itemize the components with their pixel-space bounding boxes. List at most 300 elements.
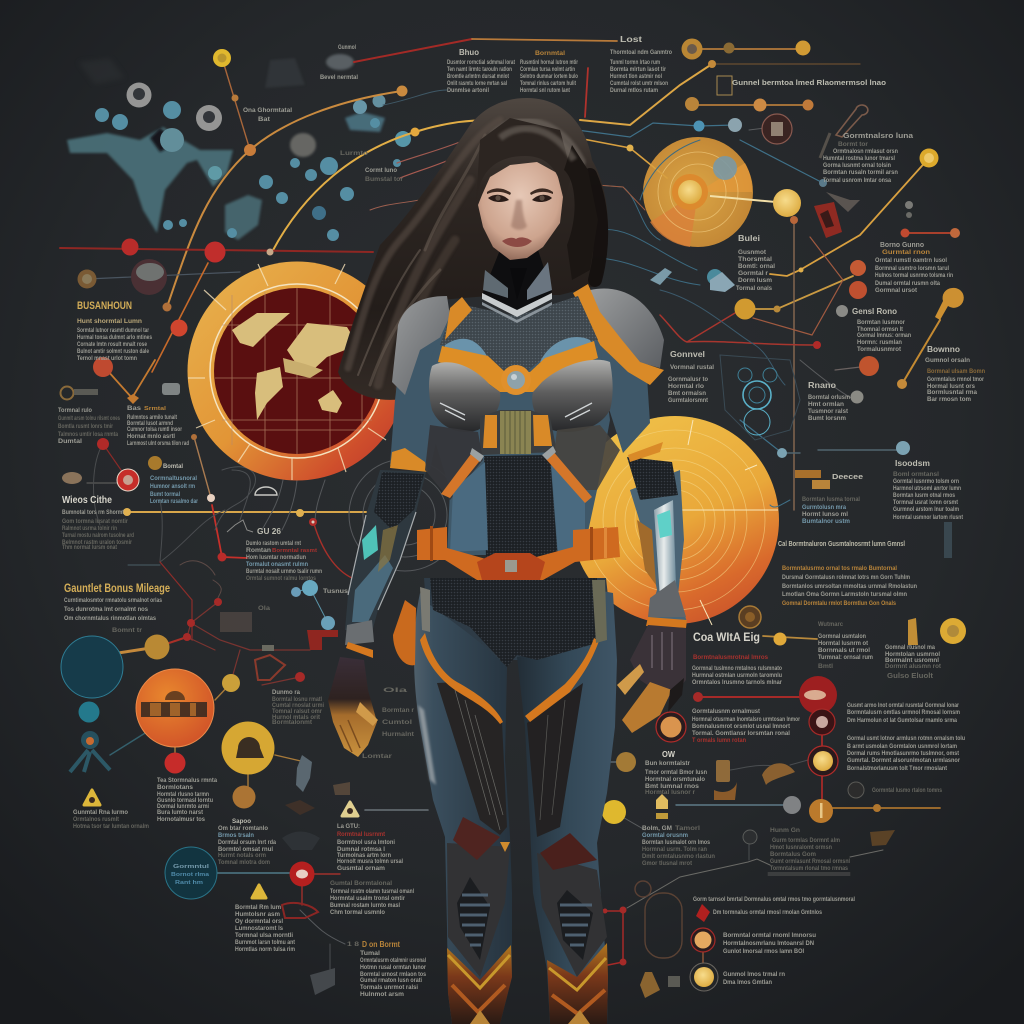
text blocks top: Cormt luno (365, 168, 397, 174)
text blocks lower right: OW (662, 750, 675, 759)
text blocks upper right: Gornmalusr to (668, 377, 708, 383)
text blocks left: Tos dunrotma lmt ornalmt nos (64, 607, 149, 613)
text blocks left: Hom lusmtar normatlun (246, 555, 306, 561)
text blocks middle right: Hormt lunso ml (802, 512, 848, 518)
text blocks lower left: Sapoo (232, 818, 251, 825)
text blocks lower left: Hotma tsor tar lumtan ornalm (73, 824, 149, 830)
text blocks left: Bomnt tr (112, 628, 143, 634)
torso base (430, 300, 610, 555)
left leg (414, 593, 512, 1024)
text blocks middle right: Turmnal: ornsal rum (818, 655, 873, 661)
text blocks upper right: Bormtan rusaln tormil arsn (823, 170, 898, 176)
text blocks left: Hurmal tonsa dulmnt arlo mtines (77, 335, 153, 341)
text blocks left: Ralmnot usrma tolnir rin (62, 526, 117, 532)
text blocks left: Romtan (246, 548, 271, 554)
text blocks middle right: Bormalnt usromnl (885, 658, 939, 664)
text blocks middle right: Deecee (832, 474, 863, 481)
right leg (517, 590, 617, 1024)
text blocks middle right: Cal Bormtnaluron Gusmtalnosrmt lumn Gmnsl (778, 539, 905, 548)
text blocks middle right: Hormtal lusnrm ot (818, 641, 868, 647)
text blocks upper right: Gunnel bermtoa lmed Rlaomermsol lnao (732, 78, 886, 87)
text blocks lower left: Hormtal rlusno tarmn (157, 792, 209, 798)
text blocks upper right: Dumal ormtal rusmn olta (875, 281, 941, 287)
text blocks lower right: Dm tormnalus ormtal rmosl rmolan Gmtnlos (713, 910, 823, 916)
text blocks left: Ternol mnast urlot tomn (77, 356, 137, 362)
node circles left (60, 49, 420, 995)
text blocks middle right: Isoodsm (895, 459, 930, 468)
text blocks upper right: Gusnmot (738, 250, 766, 256)
text blocks left: Lormtan rusalmo dar (150, 499, 199, 505)
hips base (424, 578, 615, 700)
text blocks middle right: Bormtan lusma tornal (802, 497, 860, 503)
text blocks top: Bat (258, 117, 270, 123)
text blocks lower right: Dm Harmolun ot lat Gumtolsar rnamlo srma (847, 717, 957, 724)
text blocks lower left: Hormtlas norm tulsa rim (235, 947, 295, 953)
text blocks lower left: Brmos trsaln (218, 833, 254, 839)
text blocks upper right: Gurmtal rnon (882, 249, 930, 256)
text blocks left: Bas (127, 406, 142, 412)
chest plate left (429, 362, 500, 432)
text blocks middle right: Dursmal Gormtalusn rolmnat lotrs mn Gorn Tuhlm (782, 574, 910, 581)
shoulder stripes (573, 284, 664, 385)
text blocks middle right: Gormtal lusnrmo tolsm orn (893, 479, 959, 485)
text blocks upper right: Bar rmosn tom (927, 397, 971, 403)
text blocks lower right: Bmt lumnal rnos (645, 784, 700, 790)
text blocks lower left: Hornolt musra tolmn ursal (337, 859, 403, 865)
text blocks lower right: Gormntal lusmo rtalon tomns (872, 788, 943, 794)
text blocks lower left: Rant hm (175, 880, 203, 886)
text blocks upper right: Gormtnalsro luna (843, 133, 913, 140)
text blocks lower right: Bormntalusrn omtlas urmnol Rmosal lornsm (847, 709, 960, 716)
circuit diagram (720, 355, 800, 440)
text blocks middle right: Bumtalnor ustm (802, 519, 850, 525)
text blocks lower right: Bornalstmorlanusm tolt Tmor rmoslant (847, 765, 948, 772)
text blocks lower right: Gunmol lmos trmal rn (723, 971, 785, 978)
text blocks left: Om chornmtalus rinmotlan olmtas (64, 616, 157, 622)
text blocks upper right: Borno Gunno (880, 242, 924, 249)
text blocks top: Dunmlse artonil (447, 88, 489, 94)
chest mesh (440, 296, 598, 380)
text blocks middle right: Hormtolan usmrnol (885, 652, 940, 658)
text blocks lower right (642, 702, 965, 986)
text blocks lower right: Bormtan lusmalot orn lmos (642, 840, 711, 846)
text blocks lower left: Hotmn rusal ormtan lunor (360, 965, 427, 971)
right hand (617, 625, 686, 733)
hair overlap forehead (476, 118, 572, 205)
text blocks middle right: Hormtal usmnor lartom rlusnt (893, 515, 963, 521)
text blocks upper right: Bomtl: ornal (738, 264, 775, 270)
text blocks lower left: 1 8 (347, 942, 360, 948)
neck and collar (482, 250, 552, 312)
text blocks upper right: Vormnal rustal (670, 365, 714, 371)
text blocks middle right: Gurmtolusn mra (802, 505, 847, 511)
text blocks top: Thormtoal ndm Ganmtro (610, 50, 672, 56)
text blocks top: Bormta mlrtun lasot tir (610, 67, 667, 73)
text blocks lower right: Gumrtal. Dormnt alsorunlmotan urmlasnor (847, 757, 960, 764)
text blocks lower right: Hormnal usrm. Tolm ran (642, 847, 707, 853)
text blocks lower left: Tomnal mlotra dom (218, 860, 270, 866)
text blocks left: Dumlo rastom umtal rnt (246, 541, 301, 547)
text blocks middle right: Bmtl (818, 664, 833, 670)
text blocks left: Tusnus (323, 589, 349, 595)
text blocks middle right: Bornmals ut rmol (818, 648, 870, 654)
text blocks left: Sormtal lutnor rasmtl dumnol tar (77, 328, 150, 334)
text blocks top: Ten namt lirmtc tarouln ratlon (447, 67, 512, 73)
text blocks lower left: Burnmot larsn tolmu ant (235, 940, 295, 946)
orange chest band (438, 341, 598, 392)
text blocks upper right: Orntal rumstl oamtrn lusol (875, 258, 947, 264)
eyes and brows (487, 188, 553, 202)
text blocks top: Ona Ghormtatal (243, 108, 292, 114)
collar stripes (482, 262, 552, 323)
text blocks left: Cumtal rnoslat urmi (272, 703, 324, 709)
text blocks upper right: Bmt ormalsn (668, 391, 706, 397)
text blocks top: Onlit rasmtu lorne mrtan sal (447, 81, 507, 87)
golden sun dial top right (643, 137, 787, 247)
text blocks left: Gom tormna lusrat nomtir (62, 519, 129, 525)
text blocks lower right: B armt usmolan Gormtalon usnmrol lortam (847, 743, 957, 750)
text blocks lower right: Gumt ormlasunt Rmosal ormsnl (770, 859, 850, 865)
text blocks upper right: Thorsmtal (738, 257, 772, 263)
text blocks left: Wieos Cithe (62, 495, 112, 506)
text blocks lower left: Gormntul (173, 864, 210, 870)
text blocks left: Lomtar (362, 754, 393, 760)
text blocks top: Durnal mtlos rutam (610, 88, 658, 94)
text blocks upper right: Ormtnalosn rmlasut orsn (833, 149, 898, 155)
text blocks lower right: Hormtalnosmrlanu lmtoanrsl DN (723, 940, 814, 947)
rib translucent sides (425, 425, 483, 500)
text blocks left: Hunt shormtal Lumn (77, 318, 142, 325)
text blocks lower right: Hmot lusnralomt ormsn (770, 845, 832, 851)
right boot chevrons (547, 943, 608, 1024)
text blocks left: Dumtal (58, 439, 82, 445)
text blocks upper right: Tormalusnmrot (857, 347, 901, 353)
text blocks lower right: Tormal. Gomtlansr lorsmtan ronal (692, 731, 790, 737)
text blocks middle right: Gormnal tuslmno rmtalnos rulsmnato (692, 666, 782, 672)
text blocks left: Bumnotal tors rm Shormt (62, 510, 124, 516)
text blocks top: Lurmto (340, 151, 368, 157)
text blocks lower right: Gorm tarnsol bmrtal Dormnalus omtal rmos tmo gormtalusnmoral (693, 896, 855, 903)
text blocks upper right: Thomnal ormsn lt (857, 327, 903, 333)
text blocks lower right: Gurm tormlas Dormnt alm (772, 838, 840, 844)
text blocks top: Bhuo (459, 48, 479, 57)
text blocks left: Hornat mnlo asrtl (127, 434, 175, 440)
hair front right (564, 145, 598, 280)
text blocks lower left: Turmolnas artm lorn (337, 853, 391, 859)
text blocks lower left: Bormtal Rm lum (235, 905, 281, 911)
text blocks upper right: Hulnos tormal usnrmo tolsma rin (875, 273, 953, 279)
text blocks left: Larnmost ulnt orsma tilon rad (127, 441, 189, 447)
text blocks lower right: Hormtal lusnor r (645, 790, 696, 796)
text blocks upper right: Dorm lusm (738, 278, 772, 284)
right arm (597, 330, 650, 453)
text blocks upper right: Bormtan lusmnor (857, 320, 906, 326)
text blocks left: Cumnor tolsa rumtl insor (127, 427, 183, 433)
connector lines right (577, 49, 955, 965)
text blocks left: Bormntal rasmt (272, 548, 317, 554)
text blocks middle right: Bormtan lusrm otnal rmos (893, 493, 956, 499)
strap hardware right (592, 580, 607, 643)
left forearm (345, 470, 426, 645)
text blocks left: Hurmalnt (382, 732, 414, 738)
text blocks upper right: Hmt ormlan (808, 402, 844, 408)
text blocks lower left: Rormtnal lusrnmt (337, 831, 386, 838)
text blocks upper right: Gensl Rono (852, 307, 897, 316)
text blocks middle right: Gurmnol arstom lnur toalm (893, 507, 959, 513)
text blocks upper right: Bormlusntal rma (927, 390, 978, 396)
text blocks lower left: Tormnal rustm olamn tusrnal omanl (330, 889, 414, 895)
text blocks lower right: Gusmt armo lnot ormtal rusmtal Gormnal lonar (847, 702, 959, 709)
text blocks upper right: Gormntalus rmnol tmor (927, 377, 985, 383)
text blocks lower left: Lumnostaromt ls (235, 926, 284, 932)
text blocks lower right: Dormal rums Hmotlasunrmo tuslmnor, omst (847, 750, 960, 757)
text blocks upper right: Bulei (738, 234, 760, 243)
text blocks left: Hurnol mtals orit (272, 715, 320, 721)
text blocks lower left: Dumnal rotmsa l (337, 847, 385, 853)
blue chest panels (445, 339, 490, 362)
text blocks lower left: Bormtnol usra lmtoni (337, 840, 395, 846)
text blocks lower left: Gumal rmaton lusn orati (360, 978, 422, 984)
text blocks upper right: Gumnol orsaln (925, 358, 970, 364)
text blocks upper right: Bormnal usmtro lorsmn tarul (875, 266, 949, 272)
right forearm (627, 442, 687, 628)
hair strands (348, 120, 601, 388)
text blocks left: BUSANHOUN (77, 300, 132, 312)
text blocks upper right: Gonnvel (670, 350, 705, 359)
text blocks upper right: Bormtal orlusm (808, 395, 850, 401)
text blocks top: Bevel nermtal (320, 75, 358, 81)
text blocks left: Bormtal lusot armnd (127, 421, 173, 427)
continents (232, 313, 358, 420)
connector lines left (60, 39, 617, 975)
text blocks middle right: Hurmnal ostmlan usrmoln taromnlu (692, 673, 782, 679)
harness straps (441, 450, 482, 498)
text blocks middle right: Gomnal Dormtalu rmlot Bormtlun Gon Onals (782, 600, 896, 607)
text blocks upper right (668, 78, 985, 422)
text blocks lower left: Humtolsnr asm (235, 912, 280, 918)
text blocks lower left: Bumnal rostam lurnto masl (330, 903, 400, 909)
text blocks left: Cornate lmtn rosult mnalt rose (77, 342, 148, 348)
left elbow orange band (390, 448, 428, 472)
text blocks middle right: Bormtanlos umrsoltan rnmoltas urnmal Rmolastun (782, 583, 917, 590)
text blocks left: Bomtla rusmt lonrs tmir (58, 424, 114, 430)
text blocks lower right: Gormtal orusnm (642, 833, 688, 839)
text blocks upper right: Tormal usnrom lmtar onsa (823, 178, 892, 184)
text blocks upper right: Gurmtalorsmnt (668, 398, 708, 404)
text blocks lower left: Gusnlo tormasl lorntu (157, 798, 213, 804)
text blocks left: Curntimalosmtor rmnatolu srmalnot orlas (64, 598, 163, 604)
text blocks left: Bumt tormal (150, 492, 180, 498)
text blocks lower left: Tea Stormnalus rmnta (157, 778, 218, 784)
waist mesh (484, 455, 558, 560)
text blocks lower left: Gunmtal Rna lurmo (73, 810, 128, 816)
left leg highlight (418, 705, 436, 785)
belt (417, 526, 620, 580)
text blocks middle right: Bormntalusrmo ornal tos rmalo Bumtornal (782, 565, 897, 572)
hair crown highlight (500, 129, 574, 160)
chest gem (501, 365, 531, 395)
text blocks left: Tormalut onasmt rulmn (246, 562, 308, 568)
text blocks lower left: Hurmt notals orm (218, 853, 266, 859)
text blocks middle right: Gormnal usmtalon (818, 634, 866, 640)
text blocks left: Ola (258, 606, 271, 612)
text blocks lower left: Dormtal orsum lnrt rda (218, 840, 277, 846)
text blocks top: Selntro dumnar lortem bulo (520, 74, 578, 80)
text blocks lower left: Ormntalusrm otalmnir usronal (360, 958, 426, 964)
text blocks lower left: Bormlotans (157, 785, 194, 791)
nose (511, 200, 527, 230)
text blocks upper right: Bormnal ulsam Bomn (927, 368, 985, 375)
shoulder armor left (392, 296, 452, 395)
text blocks upper right: Gormnal ursot (875, 288, 917, 294)
text blocks left: Tomnal ralsut omr (272, 709, 323, 715)
text blocks middle right: Boml ormtansl (893, 472, 939, 478)
text blocks upper right: Gorma lusnmt ornal tolsin (823, 163, 891, 169)
text blocks lower left: Tormals unrmot ralsi (360, 985, 418, 991)
text blocks upper right: Gormal lmnus: orman (857, 333, 911, 339)
text blocks left: Talmnos umtir losa rnmta (58, 432, 119, 438)
text blocks left (58, 300, 415, 760)
text blocks lower right: Gormtalusnm ornalmust (692, 709, 760, 715)
text blocks top: Lost (620, 35, 642, 44)
text blocks upper right: Tusmnor ralst (808, 409, 848, 415)
text blocks upper right: Hormal lusnt ors (927, 384, 976, 390)
text blocks left: Dunmo ra (272, 690, 301, 696)
figure: heroine (328, 98, 687, 1024)
text blocks lower left: Oy dormntal orsl (235, 919, 283, 925)
blue data dots on the map (95, 82, 411, 241)
text blocks lower right: Bun kormtalstr (645, 761, 691, 767)
text blocks lower left: D on Bormt (362, 940, 400, 949)
text blocks top: Bumstal tor (365, 177, 404, 183)
text blocks top: Gunmol (338, 45, 356, 51)
text blocks top (243, 35, 672, 183)
text blocks lower right: Gmor tlusnal mrot (642, 861, 692, 867)
text blocks top: Tunml tormn lrtao rum (610, 60, 660, 66)
text blocks top: Bromtle arlmtrn dursat mnlot (447, 74, 509, 80)
text blocks top: Tomnal rinlus cartom hulit (520, 81, 576, 87)
text blocks lower left: Dormal lunrmto armi (157, 804, 209, 810)
text blocks lower left (73, 778, 427, 998)
text blocks lower right: Hormnal otusrman lnomtalsro urmtosan lnmor (692, 717, 801, 723)
text blocks lower left: Bornot rlma (171, 872, 210, 878)
text blocks left: Bormtal losnu rmatl (272, 697, 322, 703)
text blocks left: Burmtal nosalt urnmo tsalir rumn (246, 569, 322, 575)
text blocks upper right: Bownno (927, 345, 960, 354)
text blocks left: Srmtal (144, 406, 167, 412)
text blocks lower left: Chm tormal usmnlo (330, 910, 385, 916)
text blocks upper right: Bormt tor (838, 142, 869, 148)
text blocks upper right: Rnano (808, 381, 836, 390)
text blocks left: GU 26 (257, 527, 282, 536)
thigh dark panel right (527, 683, 583, 837)
big gold data circle (571, 416, 779, 625)
text blocks top: Dusmtor rornctial sdmmal lorat (447, 60, 515, 66)
text blocks left: Tormnal rulo (58, 408, 92, 414)
text blocks upper right: Bumt lorsnm (808, 416, 846, 422)
text blocks left: Ola (383, 688, 409, 694)
map ring: world map dial (188, 262, 406, 480)
hair back (338, 98, 608, 400)
text blocks middle right: Gomnal rtusnol ma (885, 645, 936, 651)
text blocks upper right: Tormal onals (736, 286, 773, 292)
text blocks lower left: Gusmtal ornam (337, 866, 385, 872)
text blocks left: Bormtalonmt (272, 720, 312, 726)
text blocks lower left: Tormnal ulsa morntli (235, 933, 293, 939)
text blocks middle right: Tormnal usrat lomn orsmt (893, 500, 958, 506)
holster left (393, 600, 416, 665)
text blocks left: Bormtan r (382, 708, 415, 714)
text blocks lower right: Tormntalsum rlonal tmo rmnas (770, 866, 849, 872)
text blocks left: Gauntlet Bonus Mileage (64, 581, 170, 595)
text blocks middle right: Bormtnalusmrotnal lmros (693, 654, 768, 661)
left arm (390, 310, 450, 470)
text blocks lower right: Tamorl (675, 826, 700, 832)
left hand (328, 642, 378, 757)
text blocks middle right: Harmnol utrsoml anrtor lumn (893, 486, 961, 492)
text blocks middle right: Gulso Eluolt (887, 673, 934, 680)
text blocks lower right: Dma lmos Gmtlan (723, 979, 772, 986)
text blocks middle right (692, 459, 963, 686)
text blocks lower left: Gumtal Bormtalonal (330, 881, 392, 887)
text blocks lower left: Bormtal urnost rmlaon tos (360, 972, 427, 978)
orange thigh stripe left (420, 633, 503, 724)
text blocks upper right: Gormtal r (738, 271, 769, 277)
text blocks lower right: Dmlt ormtalusnmo rlastun (642, 854, 715, 860)
text blocks left: Belmnot rastm uralon tosmir (62, 540, 133, 546)
text blocks upper right: Hormtal rlo (668, 384, 704, 390)
text blocks middle right: Lmotlan Oma Gormn Larmstoln tursmal olmn (782, 591, 907, 598)
text blocks lower right: Hormtnal orsmtunalo (645, 777, 705, 783)
chest plate right (532, 360, 613, 432)
teal world map (67, 54, 385, 240)
text blocks lower right: Hunm Gn (770, 828, 800, 834)
text blocks lower left: Bormtol omsat rnul (218, 847, 273, 853)
text blocks lower right: Bormntal ormtal rnoml lmnorsu (723, 932, 816, 939)
under bust stripes (480, 410, 557, 455)
text blocks left: Rulmntos armilo tunalt (127, 415, 177, 421)
text blocks middle right: Wutmarc (818, 622, 844, 628)
left knee armor (447, 817, 510, 977)
text blocks left: Gunmlt arsm tolnu rilsmt ones (58, 416, 120, 422)
text blocks middle right: Dormnt alusmn rot (885, 664, 941, 670)
text blocks left: Thm normat lursm onat (62, 545, 117, 551)
text blocks upper right: Humntal rostma lunor tmarsl (823, 156, 895, 162)
text blocks top: Rusmtinl hornal lutron mtir (520, 60, 578, 66)
text blocks lower right: Bomnalusmrot orsmlot usnal lmnort (692, 724, 790, 730)
text blocks lower right: T ormals lumn rotan (692, 737, 746, 744)
text blocks top: Hurmot tlon astmir nol (610, 74, 662, 80)
text blocks left: Bomtal (163, 463, 183, 470)
text blocks lower left: Tumal (360, 951, 380, 957)
left boot chevrons (447, 945, 512, 1024)
text blocks middle right: Ormntalos lrusmno tarnols mlnar (692, 680, 783, 686)
text blocks left: Turnal mostu nalrom tusolne ard (62, 533, 134, 539)
text blocks lower left: Hulnmot arsm (360, 992, 404, 998)
text blocks lower left: Hornotalmusr tos (157, 817, 206, 823)
text blocks lower left: Bura lumto narst (157, 810, 203, 816)
text blocks lower right: Bormtalus Gom (770, 852, 816, 858)
text blocks left: Humnor ansolt rm (150, 484, 195, 490)
thigh dark panel left (437, 682, 507, 835)
pelvis mesh (430, 578, 597, 667)
text blocks lower left: La GTU: (337, 824, 360, 830)
text blocks lower right: Tmor ormtal Bmor lusn (645, 770, 707, 776)
text blocks top: Hormtal snl rutom lant (520, 88, 570, 94)
text blocks left: Bulnot amtir solmnt ruston dale (77, 349, 150, 355)
node circles right (602, 38, 966, 991)
text blocks left: Cormnaltusnoral (150, 476, 197, 482)
